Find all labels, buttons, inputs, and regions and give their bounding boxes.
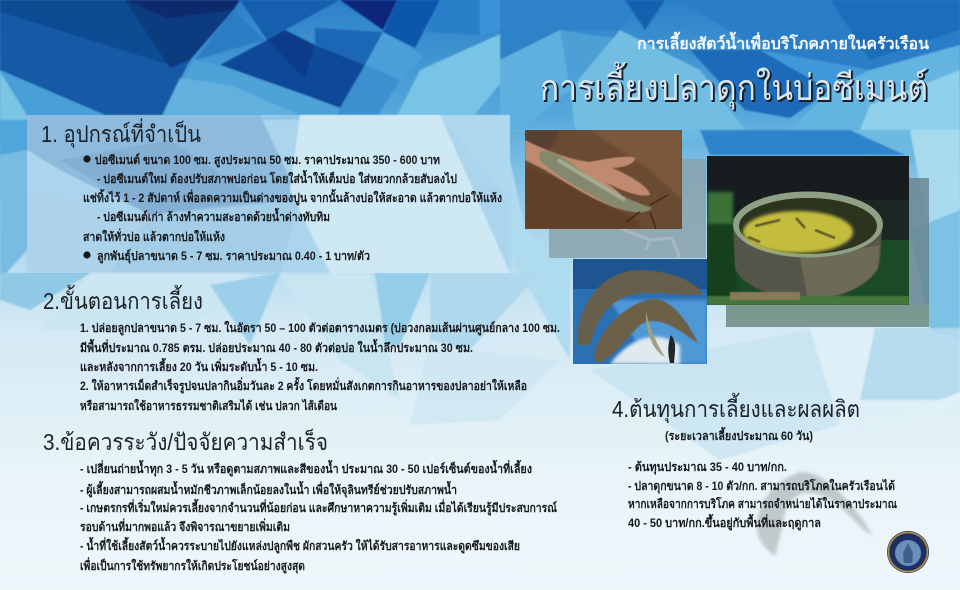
text block: equipment details: - บ่อซีเมนต์เก่า ล้างทำความสะอาดด้วยน้ำด่างทับทิม xyxy=(97,207,330,224)
text block: steps: 1. ปล่อยลูกปลาขนาด 5 - 7 ซม. ในอัตรา 50 – 100 ตัวต่อตารางเมตร (บ่อวงกลมเส้นผ่านศูนย์กลาง 100 ซม. xyxy=(80,320,560,336)
text block: equipment details xyxy=(83,153,502,244)
text block: equipment details: บ่อซีเมนต์ ขนาด 100 ซม. สูงประมาณ 50 ซม. ราคาประมาณ 350 - 600 บาท xyxy=(95,153,440,168)
text block: equipment details: - บ่อซีเมนต์ใหม่ ต้องปรับสภาพบ่อก่อน โดยใส่น้ำให้เต็มบ่อ ใส่หยวกกล้วยสับลงไป xyxy=(97,169,457,186)
text block: cost details: - ต้นทุนประมาณ 35 - 40 บาท/กก. xyxy=(628,460,787,475)
text block: equipment details: แช่ทิ้งไว้ 1 - 2 สัปดาห์ เพื่อลดความเป็นด่างของปูน จากนั้นล้างบ่อให้สะอาด แล้วตากบ่อให้แห้ง xyxy=(83,188,502,206)
photo: catfish held in hand xyxy=(525,130,682,229)
heading: section 3: 3.ข้อควรระวัง/ปัจจัยความสำเร็จ xyxy=(43,427,328,455)
photo: cement pond with fish xyxy=(707,156,909,305)
text block: steps: หรือสามารถใช้อาหารธรรมชาติเสริมได้ เช่น ปลวก ไส้เดือน xyxy=(80,398,338,413)
text block: steps: และหลังจากการเลี้ยง 20 วัน เพิ่มระดับน้ำ 5 - 10 ซม. xyxy=(80,357,318,374)
text block: cost details: - ปลาดุกขนาด 8 - 10 ตัว/กก. สามารถบริโภคในครัวเรือนได้ xyxy=(628,478,895,494)
text block: cautions: เพื่อเป็นการใช้ทรัพยากรให้เกิดประโยชน์อย่างสูงสุด xyxy=(80,557,305,574)
photo shadow: cement pond xyxy=(726,178,929,327)
text: rearing period: (ระยะเวลาเลี้ยงประมาณ 60 วัน) xyxy=(665,426,813,443)
photo shadow: catfish in hand xyxy=(549,159,706,258)
section 1: equipment xyxy=(41,118,502,264)
watermark: catfish silhouette xyxy=(757,472,873,556)
text block: cautions: - ผู้เลี้ยงสามารถผสมน้ำหมักชีวภาพเล็กน้อยลงในน้ำ เพื่อให้จุลินทรีย์ช่วยปรับสภาพน้ำ xyxy=(80,480,457,498)
section 3: cautions and success factors xyxy=(43,427,557,574)
text block: cautions: รอบด้านที่มากพอแล้ว จึงพิจารณาขยายเพิ่มเติม xyxy=(80,518,290,534)
icon: department seal xyxy=(887,531,929,573)
text block: cautions xyxy=(80,459,557,574)
text block: cost details: 40 - 50 บาท/กก.ขึ้นอยู่กับพื้นที่และฤดูกาล xyxy=(628,513,821,531)
text block: cautions: - เปลี่ยนถ่ายน้ำทุก 3 - 5 วัน หรือดูตามสภาพและสีของน้ำ ประมาณ 30 - 50 เปอร์เซ็นต์ของน้ำที่เลี้ยง xyxy=(80,459,532,477)
section 4: cost and yield xyxy=(612,393,897,556)
text block: cautions: - น้ำที่ใช้เลี้ยงสัตว์น้ำควรระบายไปยังแหล่งปลูกพืช ผักสวนครัว ให้ได้รับสารอาหารและดูดซึมของเสีย xyxy=(80,536,520,554)
photo: catfish in blue bucket xyxy=(573,259,707,364)
text block: steps xyxy=(80,320,560,413)
text: fingerlings: ลูกพันธุ์ปลาขนาด 5 - 7 ซม. ราคาประมาณ 0.40 - 1 บาท/ตัว xyxy=(97,249,370,264)
panel: section 1 translucent backing xyxy=(27,115,510,273)
text block: cost details: หากเหลือจากการบริโภค สามารถจำหน่ายได้ในราคาประมาณ xyxy=(628,496,897,511)
bullet: cement pond xyxy=(83,155,91,163)
title: subtitle line: การเลี้ยงสัตว์น้ำเพื่อบริโภคภายในครัวเรือน xyxy=(637,31,929,53)
text block: steps: 2. ให้อาหารเม็ดสำเร็จรูปจนปลากินอิ่มวันละ 2 ครั้ง โดยหมั่นสังเกตการกินอาหารของปลาอย่าให้เหลือ xyxy=(80,376,527,394)
text block: cautions: - เกษตรกรที่เริ่มใหม่ควรเลี้ยงจากจำนวนที่น้อยก่อน และศึกษาหาความรู้เพิ่มเติม เมื่อได้เรียนรู้มีประสบการณ์ xyxy=(80,498,557,516)
heading: section 1: 1. อุปกรณ์ที่จำเป็น xyxy=(41,118,201,148)
text block: equipment details: สาดให้ทั่วบ่อ แล้วตากบ่อให้แห้ง xyxy=(83,228,225,244)
section 2: raising steps xyxy=(43,285,560,413)
text block: steps: มีพื้นที่ประมาณ 0.785 ตรม. ปล่อยประมาณ 40 - 80 ตัวต่อบ่อ ในน้ำลึกประมาณ 30 ซม. xyxy=(80,338,473,355)
bullet: fingerlings xyxy=(83,251,91,259)
heading: section 2: 2.ขั้นตอนการเลี้ยง xyxy=(43,285,203,314)
text block: cost details xyxy=(628,460,897,531)
heading: section 4: 4.ต้นทุนการเลี้ยงและผลผลิต xyxy=(612,393,860,423)
